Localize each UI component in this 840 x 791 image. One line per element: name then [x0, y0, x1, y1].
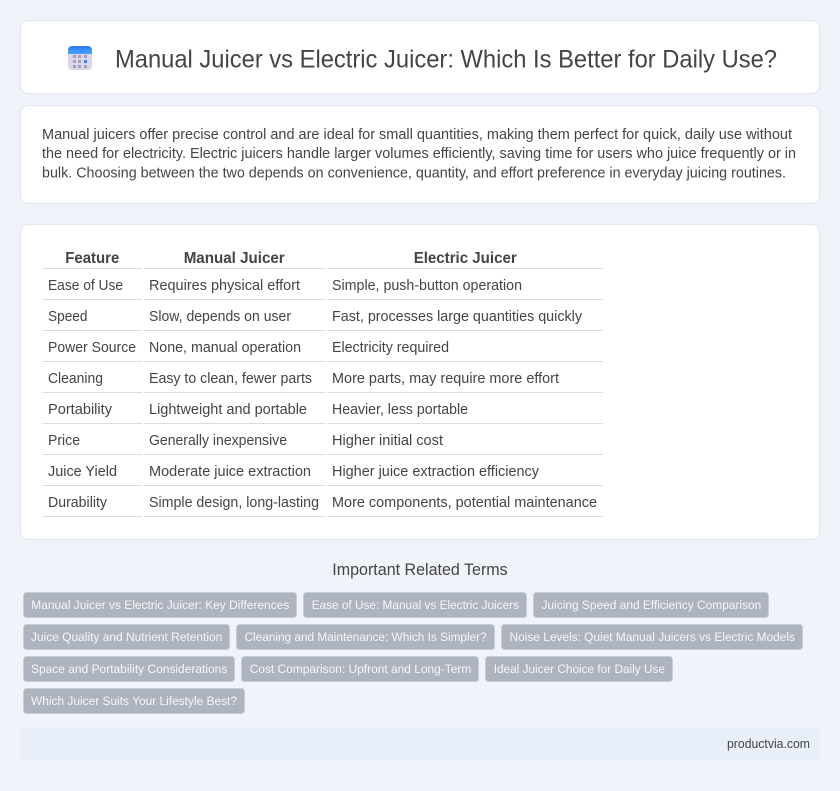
tag: [242, 656, 478, 682]
tag: [24, 656, 234, 682]
table row: portability: Portability: [48, 402, 113, 418]
table row: cleaning: More parts, may require more effort: [332, 371, 559, 387]
table row: power source: Power Source: [48, 340, 136, 356]
text block: introduction paragraph: bulk. Choosing between the two depends on convenience, quantity, and effort preference in everyday juicing routines.: [42, 164, 786, 182]
table header row: Manual Juicer: [184, 250, 285, 267]
table row: portability: [48, 402, 468, 418]
table row: durability: Simple design, long-lasting: [149, 495, 319, 511]
text block: introduction paragraph: the need for electricity. Electric juicers handle larger volumes efficiently, saving time for users who juice frequently or in: [42, 145, 796, 162]
table row: ease of use: Simple, push-button operation: [332, 278, 522, 294]
text block: introduction paragraph: Manual juicers offer precise control and are ideal for small quantities, making them perfect for quick, daily use without: [42, 126, 793, 143]
table header row: Electric Juicer: [414, 250, 517, 267]
table row: speed: Slow, depends on user: [149, 309, 291, 325]
table row: durability: Durability: [48, 495, 108, 511]
tag list: related terms: [24, 592, 802, 714]
tag: [304, 592, 526, 618]
panel: page header: [20, 20, 820, 94]
table row: speed: [48, 309, 583, 325]
tag: Juice Quality and Nutrient Retention: [31, 630, 222, 644]
tag: [24, 624, 230, 650]
tag: Space and Portability Considerations: [31, 662, 227, 676]
table row: cleaning: [48, 371, 559, 387]
table row: speed: Speed: [48, 309, 88, 325]
table header row: Feature: [65, 250, 120, 267]
tag: Ease of Use: Manual vs Electric Juicers: [312, 598, 519, 612]
table row: price: Generally inexpensive: [149, 433, 287, 449]
tag: [24, 688, 244, 714]
table row: cleaning: Cleaning: [48, 371, 103, 387]
tag: Which Juicer Suits Your Lifestyle Best?: [31, 694, 237, 708]
tag: Juicing Speed and Efficiency Comparison: [542, 598, 761, 612]
tag: [534, 592, 768, 618]
table row: durability: [48, 495, 597, 511]
table row: ease of use: Ease of Use: [48, 278, 123, 294]
tag: [486, 656, 672, 682]
table row: speed: Fast, processes large quantities quickly: [332, 309, 583, 325]
panel: comparison table: [20, 224, 820, 540]
heading: important related terms: Important Related Terms: [332, 561, 508, 579]
table header row: [65, 250, 517, 267]
table row: power source: [48, 340, 449, 356]
table row: juice yield: [48, 464, 540, 480]
panel: introduction: [20, 106, 820, 204]
table row: juice yield: Juice Yield: [48, 464, 117, 480]
footer credit: productvia.com: [727, 736, 810, 751]
table row: portability: Heavier, less portable: [332, 402, 468, 418]
table row: price: Price: [48, 433, 80, 449]
table row: price: Higher initial cost: [332, 433, 443, 449]
table row: power source: Electricity required: [332, 340, 449, 356]
table row: juice yield: Moderate juice extraction: [149, 464, 311, 480]
tag: Noise Levels: Quiet Manual Juicers vs Electric Models: [510, 630, 795, 644]
tag: Cost Comparison: Upfront and Long-Term: [250, 662, 471, 676]
footer: [20, 727, 820, 761]
table row: cleaning: Easy to clean, fewer parts: [149, 371, 312, 387]
title: Manual Juicer vs Electric Juicer: Which Is Better for Daily Use?: [115, 46, 777, 74]
icon: calendar: [68, 46, 92, 70]
table row: portability: Lightweight and portable: [149, 402, 307, 418]
table row: ease of use: Requires physical effort: [149, 278, 300, 294]
table row: ease of use: [48, 278, 522, 294]
tag: Cleaning and Maintenance: Which Is Simpler?: [244, 630, 487, 644]
tag: Manual Juicer vs Electric Juicer: Key Differences: [31, 598, 289, 612]
table row: durability: More components, potential maintenance: [332, 495, 597, 511]
table row: price: [48, 433, 443, 449]
tag: Ideal Juicer Choice for Daily Use: [494, 662, 665, 676]
tag: [502, 624, 802, 650]
tag: [24, 592, 296, 618]
table row: power source: None, manual operation: [149, 340, 301, 356]
tag: [236, 624, 494, 650]
table row: juice yield: Higher juice extraction efficiency: [332, 464, 540, 480]
text block: introduction paragraph: [42, 126, 796, 182]
